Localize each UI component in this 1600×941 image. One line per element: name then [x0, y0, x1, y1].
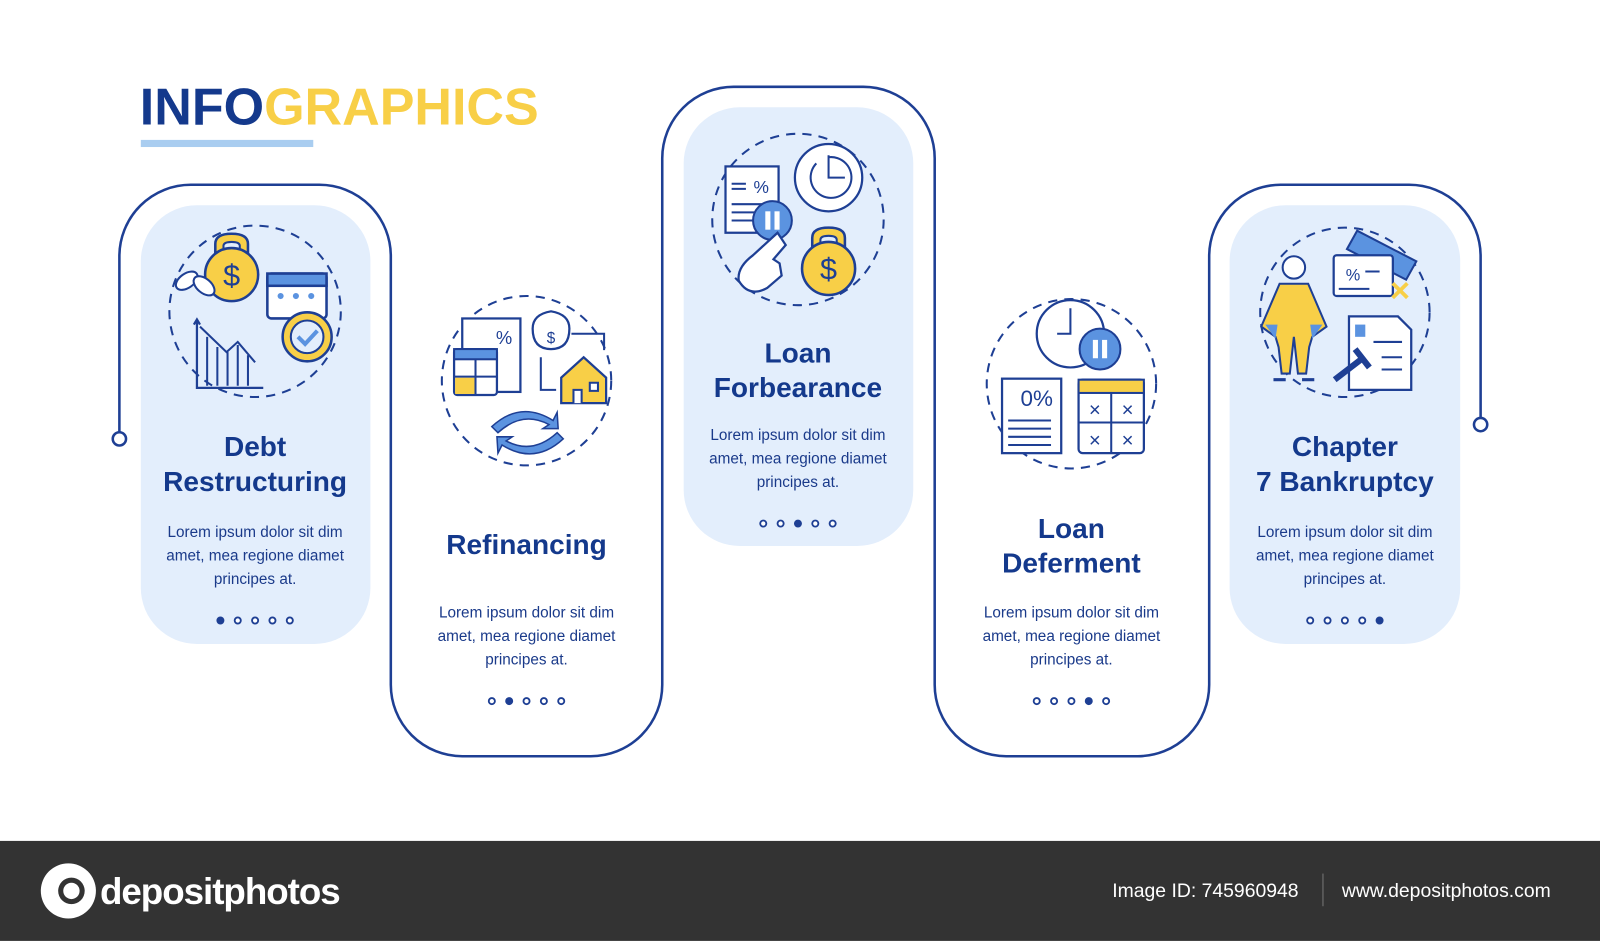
heading: Debt — [224, 431, 286, 462]
text block: amet, mea regione diamet — [438, 628, 616, 645]
text block: Lorem ipsum dolor sit dim — [439, 604, 614, 621]
panel: loan forbearance — [684, 107, 913, 546]
panel: loan deferment: Deferment — [1002, 548, 1141, 579]
text block: amet, mea regione diamet — [166, 547, 345, 564]
panel: loan deferment — [983, 299, 1161, 704]
text block: principes at. — [1030, 651, 1113, 668]
panel: chapter 7 bankruptcy — [1230, 205, 1460, 644]
connector outline — [119, 87, 1481, 756]
text block: principes at. — [485, 651, 568, 668]
text block: Lorem ipsum dolor sit dim — [984, 604, 1159, 621]
footer bar: www.depositphotos.com — [1341, 880, 1551, 902]
icon: loan deferment — [987, 299, 1156, 468]
dots — [1034, 698, 1109, 704]
icon: loan deferment: × — [1122, 399, 1134, 421]
text block: amet, mea regione diamet — [709, 450, 888, 467]
title: INFOGRAPHICS — [140, 79, 539, 137]
icon: refinancing: % — [496, 327, 512, 348]
icon: refinancing — [442, 296, 611, 465]
dots — [760, 520, 836, 527]
heading: Refinancing — [446, 529, 607, 560]
icon: loan deferment: × — [1122, 430, 1134, 452]
text block: Lorem ipsum dolor sit dim — [710, 427, 886, 444]
icon: bankruptcy: × — [1390, 272, 1410, 310]
panel: refinancing — [438, 296, 616, 704]
footer bar: depositphotos — [100, 871, 340, 912]
text block: principes at. — [214, 571, 296, 588]
dots — [489, 698, 564, 704]
icon: debt restructuring — [169, 226, 341, 397]
text block: principes at. — [1304, 571, 1386, 588]
panel: debt restructuring: Restructuring — [163, 466, 347, 497]
text block: principes at. — [757, 474, 839, 491]
heading: Chapter — [1292, 431, 1398, 462]
icon: loan deferment: × — [1089, 399, 1101, 421]
icon: refinancing: $ — [547, 330, 556, 347]
icon: bankruptcy — [1260, 228, 1430, 397]
icon: loan forbearance — [712, 134, 884, 305]
panel: loan forbearance: Forbearance — [714, 372, 882, 403]
heading: Loan — [764, 337, 831, 368]
icon: bankruptcy: % — [1346, 267, 1360, 285]
icon: loan deferment: × — [1089, 430, 1101, 452]
dots — [217, 617, 293, 624]
text block: amet, mea regione diamet — [983, 628, 1161, 645]
heading: Loan — [1038, 513, 1105, 544]
footer bar — [0, 841, 1600, 941]
icon: camera logo — [41, 863, 96, 918]
text block: Lorem ipsum dolor sit dim — [1257, 524, 1432, 541]
footer bar: Image ID: 745960948 — [1112, 880, 1299, 902]
panel: debt restructuring — [141, 205, 370, 644]
text block: amet, mea regione diamet — [1256, 547, 1434, 564]
icon: loan deferment: 0% — [1021, 386, 1053, 411]
dots — [1307, 617, 1383, 624]
text block: Lorem ipsum dolor sit dim — [168, 524, 343, 541]
icon: loan forbearance: % — [754, 177, 769, 197]
panel: chapter 7 bankruptcy: 7 Bankruptcy — [1256, 466, 1434, 497]
